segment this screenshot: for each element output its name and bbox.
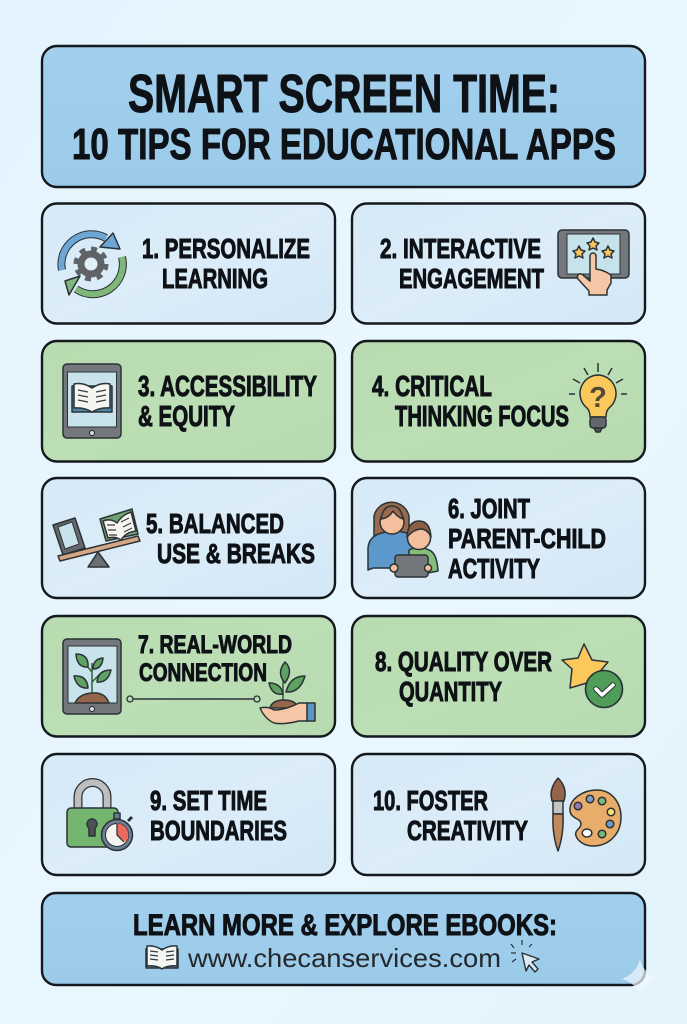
icon: cursor click xyxy=(511,940,539,972)
icon: light bulb with question mark: ? xyxy=(589,382,607,414)
icon: seesaw balancing tablet and book xyxy=(53,509,140,567)
panel: tip 8 quality over quantity xyxy=(352,616,645,736)
tip 2 label: 2. INTERACTIVE xyxy=(380,233,541,264)
icon: hand holding seedling xyxy=(260,662,315,724)
tip 10 label xyxy=(373,785,528,846)
icon: padlock with stopwatch xyxy=(67,782,132,850)
icon: open book xyxy=(146,946,178,969)
tip 7 label: CONNECTION xyxy=(139,659,267,687)
tip 1 label xyxy=(142,233,310,294)
icon: light bulb with question mark xyxy=(569,363,627,432)
tip 2 label: ENGAGEMENT xyxy=(399,263,544,294)
tip 7 label xyxy=(138,631,292,687)
tip 9 label: 9. SET TIME xyxy=(150,785,267,816)
tip 3 label xyxy=(138,371,317,433)
icon: tablet with seedling xyxy=(63,639,121,714)
tip 4 label xyxy=(372,371,569,433)
footer heading: LEARN MORE & EXPLORE EBOOKS: xyxy=(133,909,557,942)
tip 3 label: 3. ACCESSIBILITY xyxy=(138,371,317,403)
tip 2 label xyxy=(380,233,544,294)
icon: parent and child with tablet xyxy=(368,502,438,577)
tip 6 label: PARENT-CHILD xyxy=(448,523,606,554)
tip 8 label: 8. QUALITY OVER xyxy=(375,646,552,677)
panel: tip 7 real-world connection xyxy=(42,616,335,736)
tip 10 label: CREATIVITY xyxy=(407,815,528,846)
icon: paint palette xyxy=(570,790,621,846)
website address: www.checanservices.com xyxy=(187,943,501,973)
tip 8 label: QUANTITY xyxy=(399,676,502,707)
icon: gear with cycle arrows xyxy=(61,233,123,295)
tip 9 label: BOUNDARIES xyxy=(150,815,287,846)
tip 1 label: LEARNING xyxy=(162,263,268,294)
icon: tablet with stars and pointing hand xyxy=(558,230,629,295)
panel: tip 9 set time boundaries xyxy=(42,754,335,875)
tip 6 label: 6. JOINT xyxy=(448,493,530,524)
tip 4 label: 4. CRITICAL xyxy=(372,371,492,403)
tip 6 label xyxy=(448,493,606,584)
tip 3 label: & EQUITY xyxy=(138,401,235,433)
tip 4 label: THINKING FOCUS xyxy=(395,401,569,433)
tip 7 label: 7. REAL-WORLD xyxy=(138,631,292,659)
tip 5 label: USE & BREAKS xyxy=(157,538,315,569)
panel: tip 4 critical thinking focus xyxy=(352,341,645,462)
icon: tablet with open book xyxy=(63,364,121,438)
icon: star with check badge xyxy=(562,644,622,708)
tip 6 label: ACTIVITY xyxy=(448,553,540,584)
tip 5 label xyxy=(146,508,315,569)
footer banner xyxy=(42,893,645,985)
title banner xyxy=(42,46,645,187)
tip 10 label: 10. FOSTER xyxy=(373,785,488,816)
panel: tip 5 balanced use and breaks xyxy=(42,478,335,598)
tip 8 label xyxy=(375,646,552,707)
tip 1 label: 1. PERSONALIZE xyxy=(142,233,310,264)
panel: tip 2 interactive engagement xyxy=(352,204,645,324)
connector line xyxy=(127,696,260,702)
panel: tip 10 foster creativity xyxy=(352,754,645,875)
icon: paintbrush xyxy=(551,778,565,851)
tip 5 label: 5. BALANCED xyxy=(146,508,284,539)
tip 9 label xyxy=(150,785,287,846)
panel: tip 6 joint parent-child activity xyxy=(352,478,645,598)
watermark sparkle xyxy=(622,959,660,996)
panel: tip 3 accessibility and equity xyxy=(42,341,335,462)
panel: tip 1 personalize learning xyxy=(42,204,335,324)
